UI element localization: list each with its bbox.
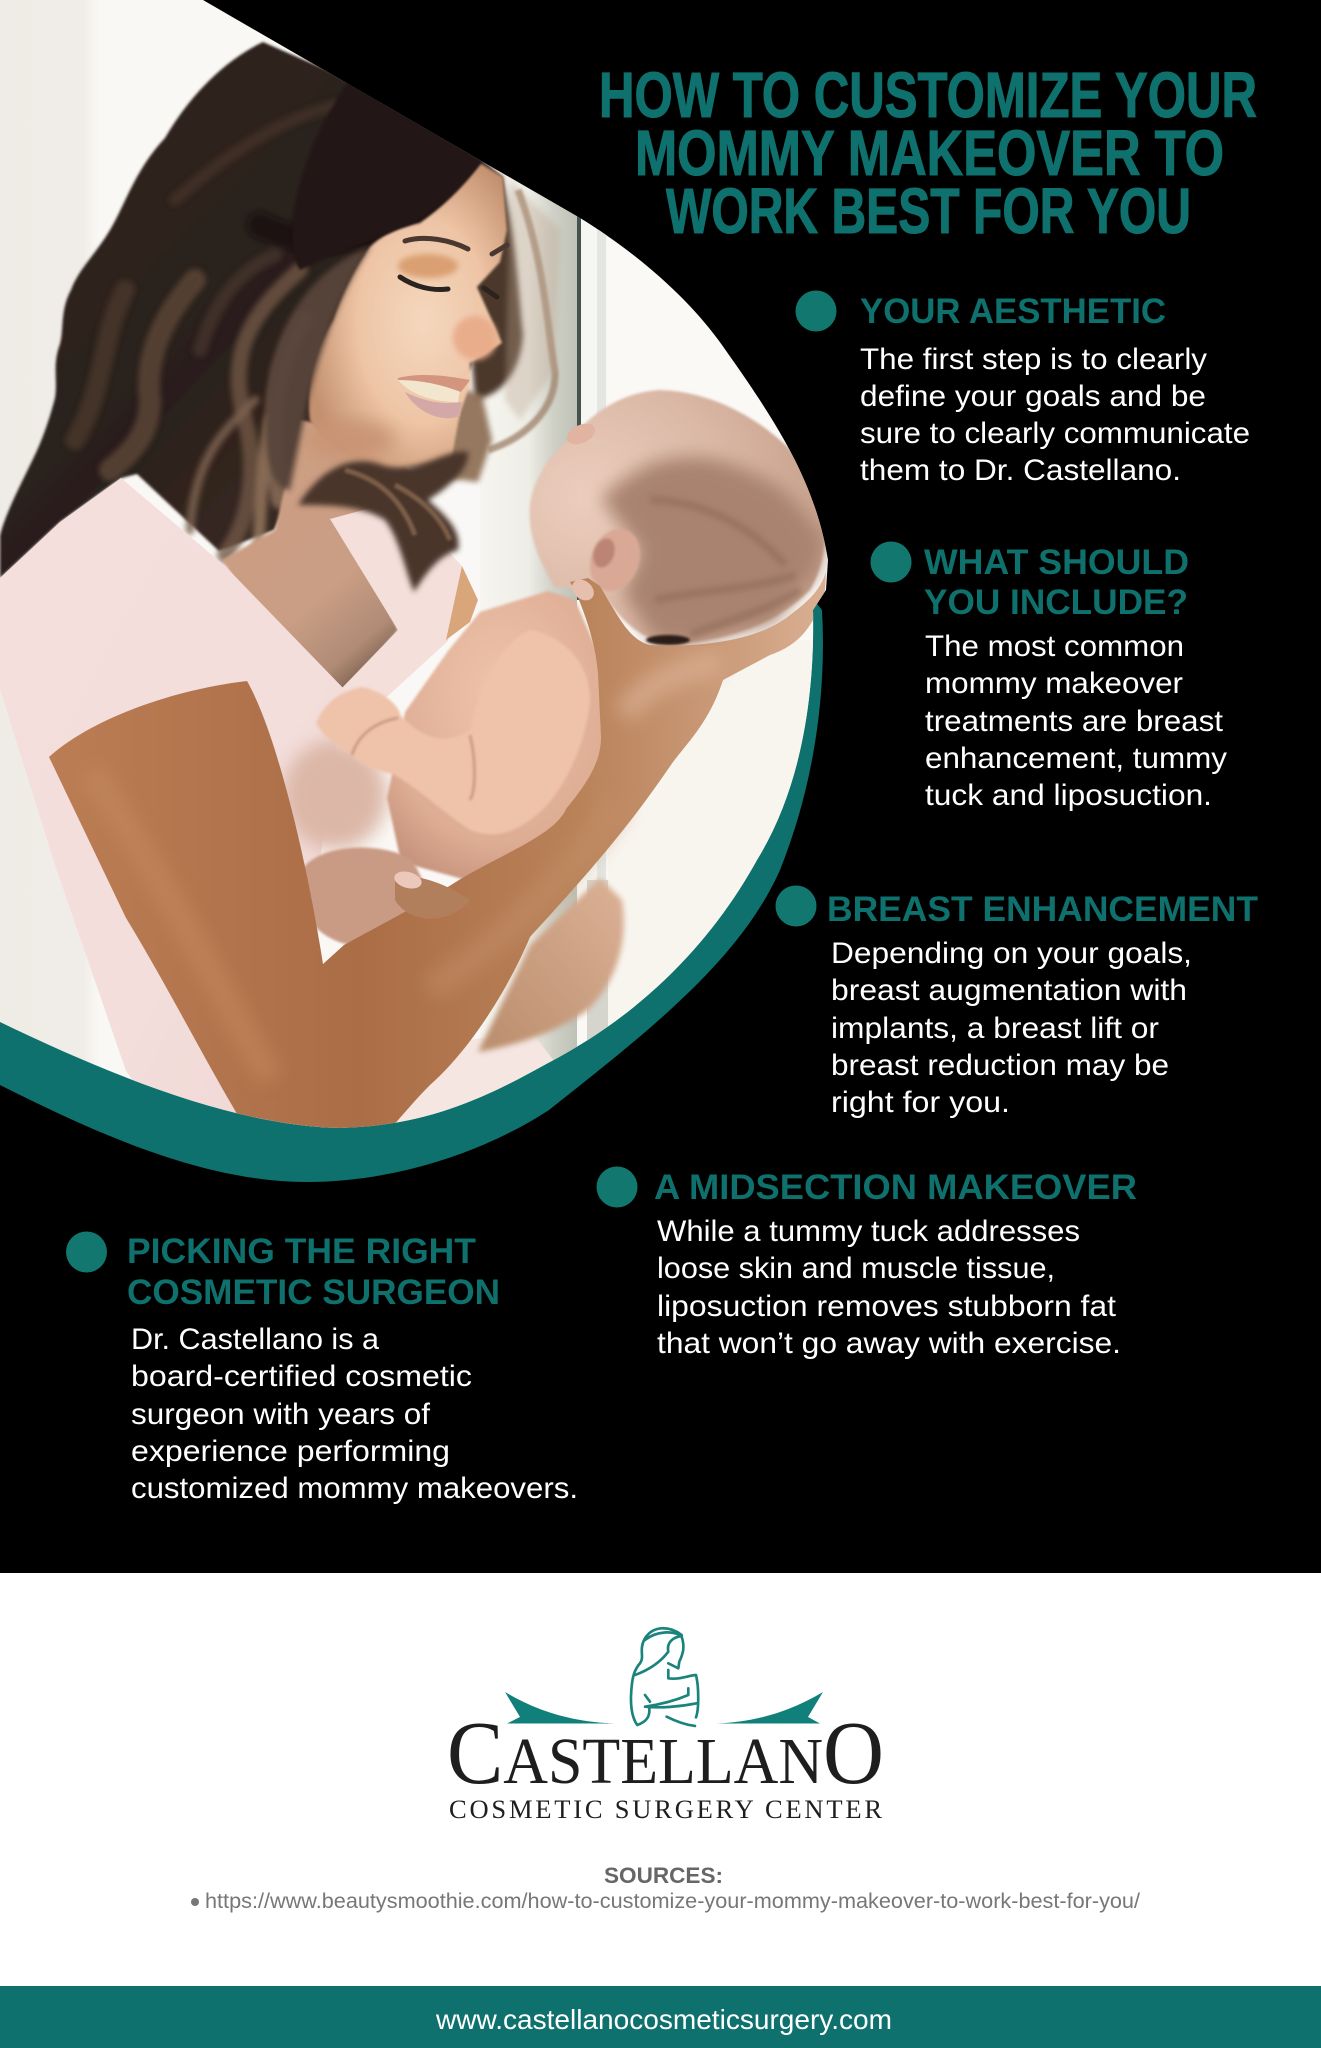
body text: The most common xyxy=(925,630,1184,663)
smile xyxy=(398,375,470,418)
bullet xyxy=(66,1232,107,1272)
section: what should you include xyxy=(870,542,1227,812)
lower shirt shadow over chest xyxy=(283,740,387,850)
upper arm highlight xyxy=(90,770,270,1080)
body text: mommy makeover xyxy=(925,667,1183,700)
side hair beside cheek xyxy=(265,247,370,490)
section: breast enhancement xyxy=(776,886,1258,1119)
bullet xyxy=(870,542,912,582)
body text: enhancement, tummy xyxy=(925,742,1227,775)
logo: Castellano Cosmetic Surgery Center xyxy=(447,1628,884,1824)
bullet xyxy=(776,886,816,926)
body text: liposuction removes stubborn fat xyxy=(657,1290,1117,1323)
mother arm and hand xyxy=(49,572,826,1135)
body text: board-certified cosmetic xyxy=(131,1360,472,1393)
baby torso xyxy=(387,591,612,880)
black background panel xyxy=(0,0,1321,1574)
neck shadow under head xyxy=(646,635,690,645)
upper lip xyxy=(398,375,470,392)
heading: COSMETIC SURGEON xyxy=(127,1273,500,1312)
shirt xyxy=(0,478,345,1130)
second hand fingers xyxy=(395,877,470,919)
second hand nail xyxy=(392,869,424,891)
nose shading xyxy=(453,316,497,360)
body text: them to Dr. Castellano. xyxy=(860,454,1181,487)
body text: treatments are breast xyxy=(925,705,1224,738)
source bullet xyxy=(191,1898,199,1906)
neck and chest xyxy=(222,420,415,692)
eyebrows xyxy=(405,238,507,254)
baby arm xyxy=(316,630,590,834)
body text: right for you. xyxy=(831,1086,1010,1119)
heading: A MIDSECTION MAKEOVER xyxy=(654,1168,1137,1207)
forearm highlight xyxy=(430,800,620,990)
body text: that won’t go away with exercise. xyxy=(657,1327,1121,1360)
section: picking the right cosmetic surgeon xyxy=(66,1232,578,1505)
hair back mass xyxy=(0,42,507,578)
teal ring around photo xyxy=(0,600,823,1182)
lower lip xyxy=(405,392,462,418)
body text xyxy=(831,937,1192,1119)
body text: breast reduction may be xyxy=(831,1049,1169,1082)
website url: www.castellanocosmeticsurgery.com xyxy=(435,2004,892,2035)
body text: breast augmentation with xyxy=(831,974,1187,1007)
bullet xyxy=(596,1166,638,1208)
body text xyxy=(657,1215,1121,1360)
logo name: CASTELLANO xyxy=(447,1704,884,1803)
baby head xyxy=(530,390,825,645)
lower shirt hem xyxy=(395,1038,554,1123)
hair highlights xyxy=(75,105,430,555)
shirt strap xyxy=(330,500,462,705)
body text: While a tummy tuck addresses xyxy=(657,1215,1080,1248)
bullet xyxy=(796,290,836,332)
baby arm crease xyxy=(352,718,474,800)
photo: mother holding baby xyxy=(0,0,830,1135)
other forearm xyxy=(478,878,624,1052)
baby nose xyxy=(567,424,595,444)
section: your aesthetic xyxy=(796,290,1250,487)
sources xyxy=(191,1863,1140,1913)
baby leg xyxy=(299,848,430,947)
body text xyxy=(860,343,1250,487)
body text xyxy=(925,630,1227,812)
right dark hair behind face xyxy=(470,175,523,400)
hand palm highlight xyxy=(625,662,720,715)
section: a midsection makeover xyxy=(596,1166,1137,1360)
face xyxy=(309,163,507,468)
eyeshadow xyxy=(398,254,458,278)
body text: Dr. Castellano is a xyxy=(131,1323,379,1356)
body text: tuck and liposuction. xyxy=(925,779,1212,812)
body text: customized mommy makeovers. xyxy=(131,1472,578,1505)
body text: Depending on your goals, xyxy=(831,937,1192,970)
wall background xyxy=(0,0,830,1130)
white footer panel xyxy=(0,1573,1321,1987)
hair locks on chest xyxy=(298,452,468,592)
teeth xyxy=(398,380,460,402)
closed eyes xyxy=(400,277,497,297)
chin and jaw shadow xyxy=(305,422,395,458)
body text: experience performing xyxy=(131,1435,450,1468)
baby hair xyxy=(601,457,826,644)
body text: define your goals and be xyxy=(860,380,1206,413)
front hair over forehead xyxy=(292,80,483,270)
body text: loose skin and muscle tissue, xyxy=(657,1252,1055,1285)
sources heading: SOURCES: xyxy=(604,1863,723,1888)
heading: BREAST ENHANCEMENT xyxy=(827,890,1258,929)
logo wings xyxy=(505,1692,823,1724)
body text: implants, a breast lift or xyxy=(831,1012,1159,1045)
heading xyxy=(924,543,1189,622)
body text: surgeon with years of xyxy=(131,1398,431,1431)
body text xyxy=(131,1323,578,1505)
body text: The first step is to clearly xyxy=(860,343,1207,376)
heading xyxy=(127,1232,500,1312)
logo tagline: COSMETIC SURGERY CENTER xyxy=(449,1794,882,1824)
baby hair strands xyxy=(650,500,800,635)
shoulder skin behind strap xyxy=(446,566,478,640)
source url: https://www.beautysmoothie.com/how-to-customize-your-mommy-makeover-to-work-best-for-you/ xyxy=(205,1889,1140,1913)
heading: YOU INCLUDE? xyxy=(924,583,1188,622)
thumb nail xyxy=(568,575,598,605)
heading: PICKING THE RIGHT xyxy=(127,1232,476,1271)
translucent side lock wash xyxy=(505,180,560,420)
title xyxy=(599,59,1257,247)
translucent side lock xyxy=(488,190,555,450)
hair below cheek xyxy=(445,385,492,482)
logo woman figure xyxy=(631,1628,698,1726)
baby ear xyxy=(590,530,640,592)
window frame xyxy=(480,170,830,1100)
heading: YOUR AESTHETIC xyxy=(860,292,1166,331)
body text: sure to clearly communicate xyxy=(860,417,1250,450)
teal footer band xyxy=(0,1986,1321,2048)
heading: WHAT SHOULD xyxy=(924,543,1189,582)
